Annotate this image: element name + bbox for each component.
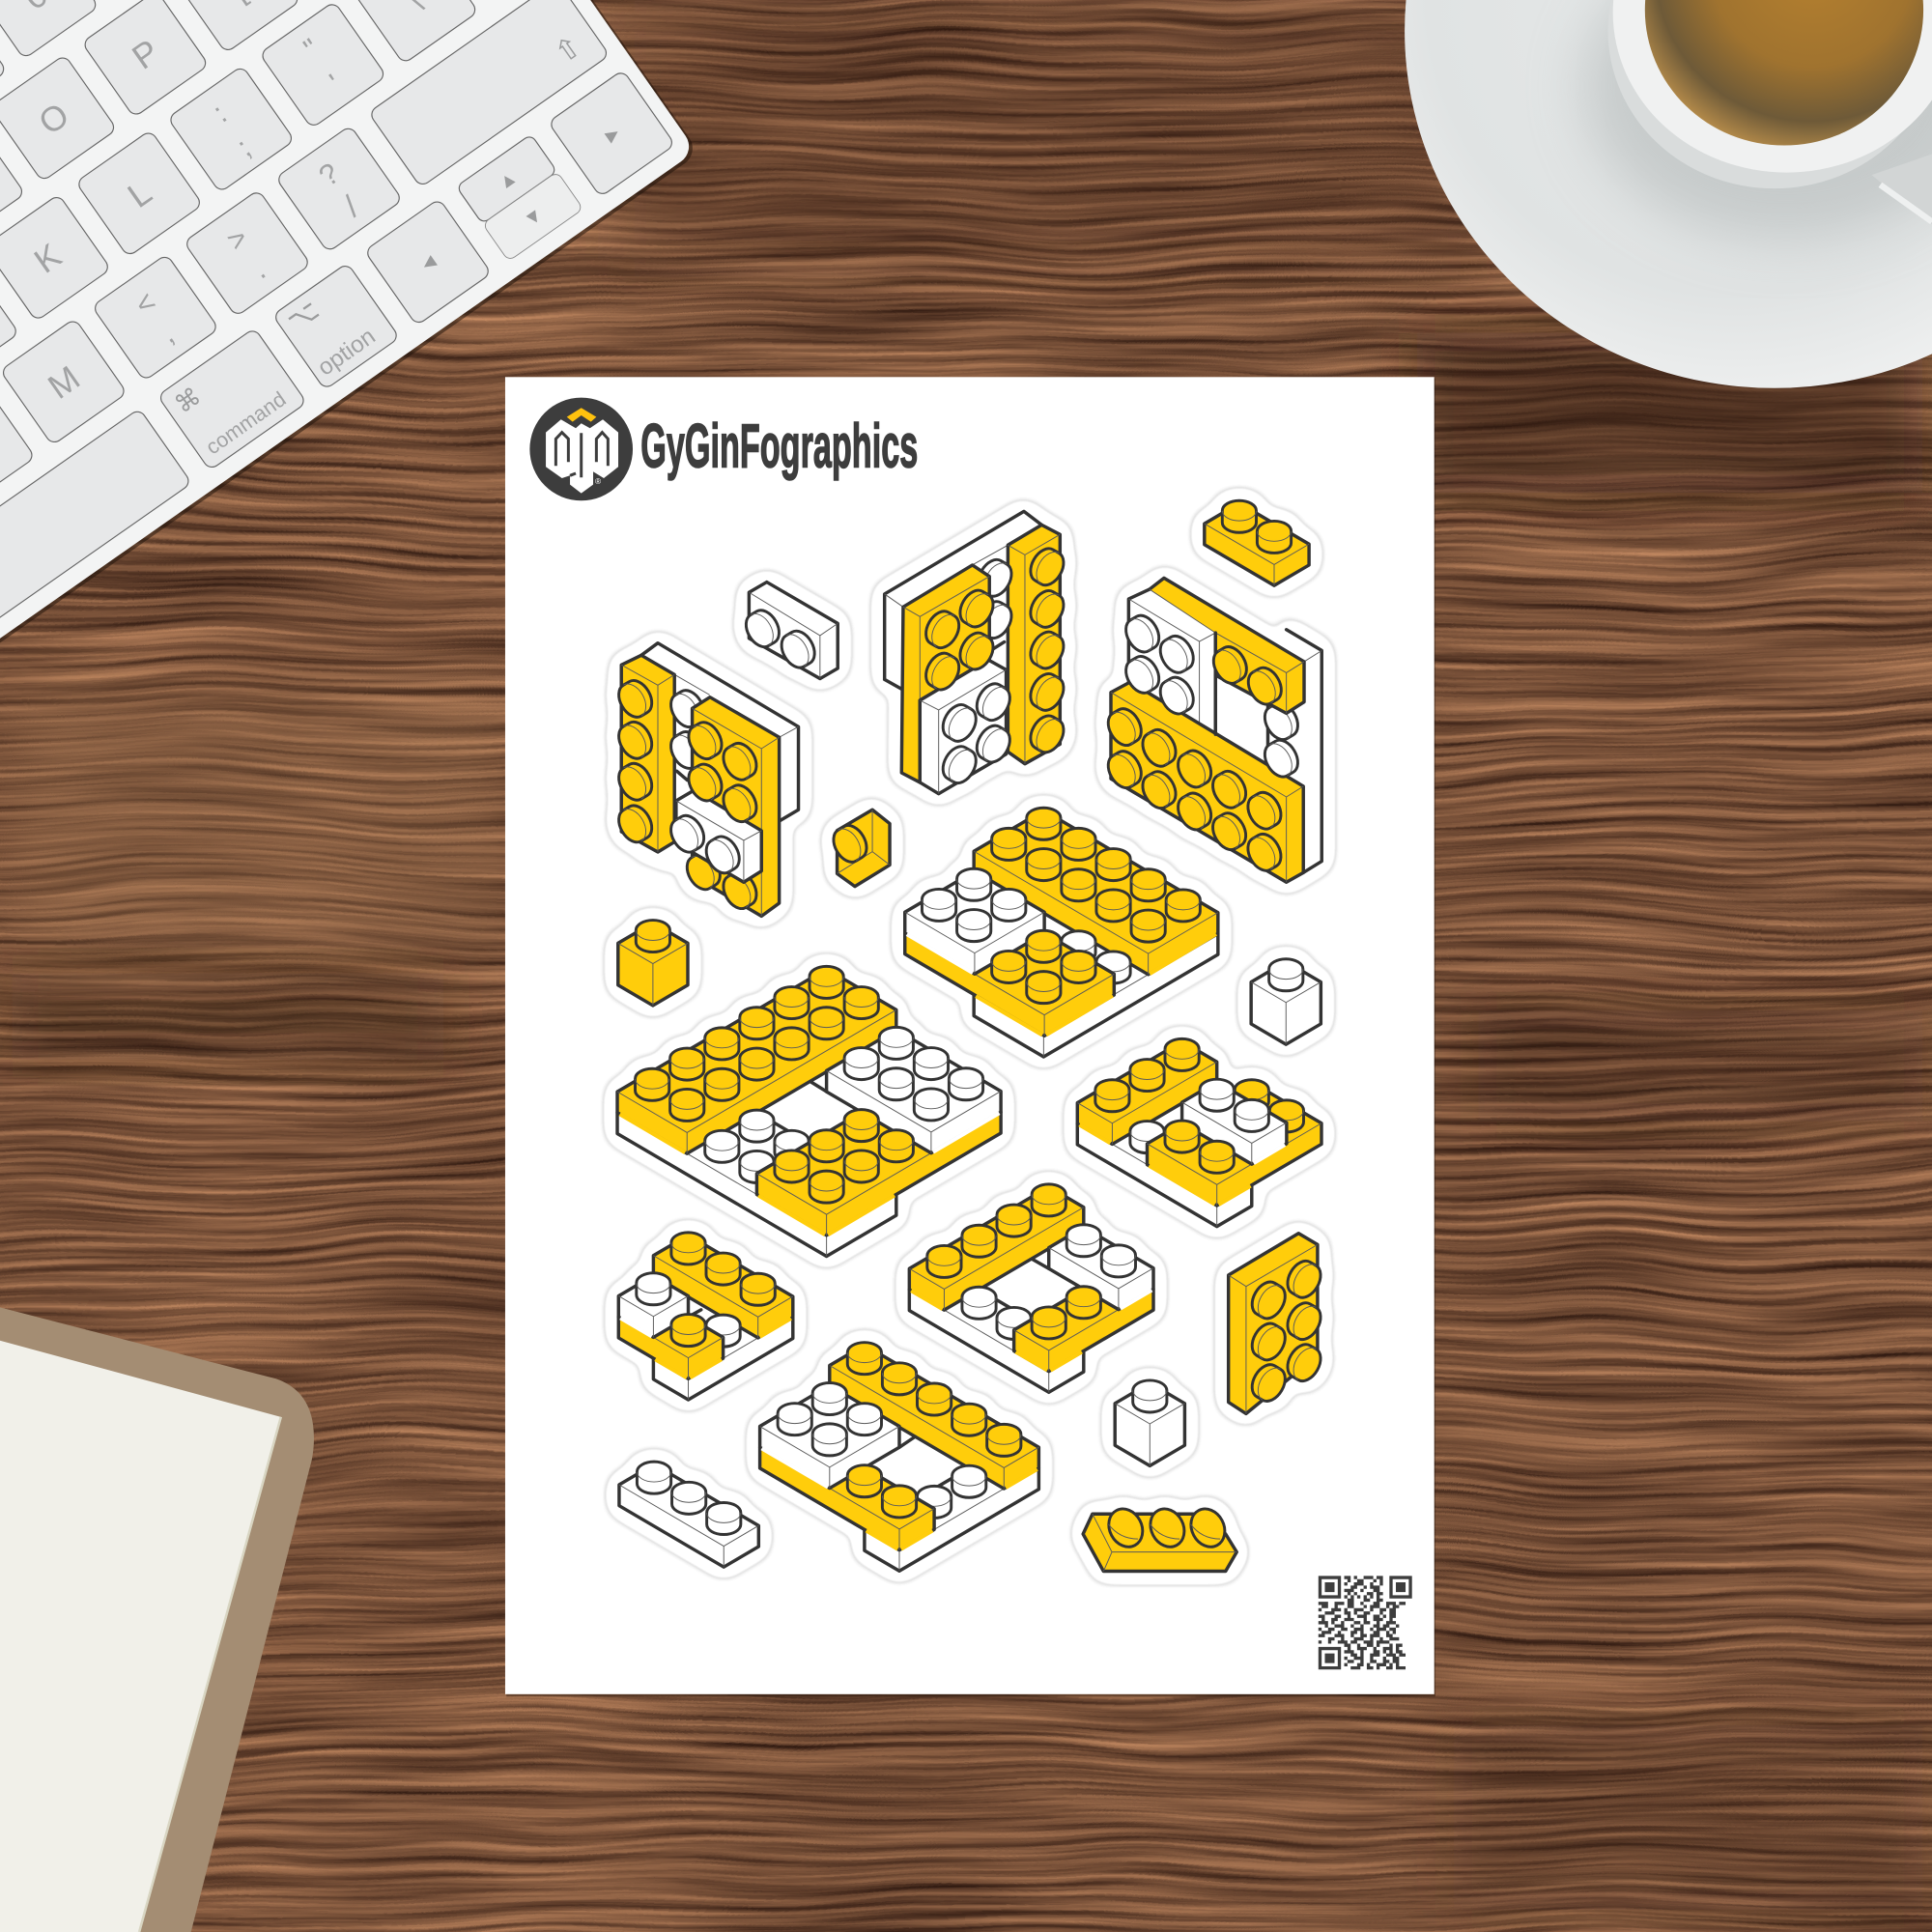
white base brick	[909, 1269, 1084, 1392]
yellow upper strip	[1150, 578, 1304, 713]
yellow back brick	[1077, 1038, 1217, 1144]
white right bar	[1282, 630, 1321, 872]
sticker: white cube brick right	[1251, 959, 1321, 1044]
sticker: wall letter left	[619, 643, 799, 916]
white top brick	[1049, 1227, 1153, 1310]
keyboard: K	[27, 236, 69, 281]
keyboard: command	[201, 386, 291, 459]
sticker: yellow plate right	[1229, 1234, 1321, 1413]
keyboard: '	[324, 68, 348, 99]
notebook	[0, 1307, 314, 1932]
sticker: small yellow 2-stud brick	[1205, 500, 1309, 585]
logo: GyGinFographics	[529, 398, 918, 500]
logo mark: ®	[595, 476, 601, 486]
sticker: small white 2-stud wall brick	[746, 582, 838, 679]
keyboard: ,	[154, 318, 180, 350]
yellow long brick	[830, 1343, 1038, 1489]
sticker: wall letter centre	[885, 511, 1064, 794]
yellow 2x6 brick	[617, 966, 896, 1153]
sticker: big flat letter	[617, 966, 1001, 1257]
yellow front brick	[1014, 1268, 1153, 1372]
hole edges	[1266, 705, 1269, 753]
yellow back brick	[909, 1184, 1084, 1310]
right yellow block	[693, 697, 780, 916]
keyboard: M	[42, 358, 87, 407]
yellow front brick	[905, 893, 1114, 1036]
keyboard	[0, 0, 693, 643]
QR code	[1319, 1576, 1412, 1669]
yellow upper block	[901, 565, 989, 782]
sticker: yellow 3-stud side brick	[1083, 1503, 1236, 1572]
white backing plate	[885, 511, 1060, 739]
sticker: white 3-stud brick	[619, 1462, 758, 1567]
white backing plate	[640, 643, 799, 863]
keyboard: O	[32, 96, 76, 142]
white front brick	[676, 790, 761, 882]
white upper block	[1128, 589, 1215, 739]
window opening	[863, 1423, 967, 1509]
keyboard: ⇧	[549, 29, 588, 71]
logo wordmark: GyGinFographics	[640, 411, 918, 480]
keyboard: ⌘	[170, 382, 207, 420]
white base brick	[653, 1297, 793, 1400]
white base brick	[617, 1071, 896, 1257]
keyboard: <	[129, 285, 162, 322]
keyboard: /	[338, 189, 366, 224]
window opening	[982, 1244, 1078, 1331]
yellow front brick	[1148, 1082, 1321, 1206]
left yellow column	[621, 655, 674, 852]
sticker: flat letter lower left	[618, 1233, 793, 1400]
keyboard: option	[313, 324, 381, 382]
window opening	[739, 1060, 881, 1164]
keyboard: L	[121, 173, 158, 215]
keyboard: ▼	[524, 207, 543, 227]
white top brick	[760, 1385, 899, 1489]
sticker: flat letter centre lower	[909, 1184, 1153, 1392]
white base brick	[865, 1448, 1038, 1571]
keyboard: ;	[231, 131, 257, 163]
white single brick	[618, 1275, 688, 1337]
sticker: flat letter top centre	[905, 808, 1218, 1057]
yellow lower brick	[756, 1071, 1001, 1236]
window opening	[1144, 1099, 1185, 1139]
white base brick	[974, 893, 1218, 1057]
logo mark	[529, 398, 633, 500]
sticker: white cube brick lower	[1115, 1380, 1184, 1465]
white base brick	[1077, 1103, 1252, 1227]
coffee cup and saucer	[1405, 0, 1932, 388]
white top brick	[1182, 1082, 1287, 1164]
sticker: yellow cube brick	[618, 921, 688, 1006]
big yellow plate	[1111, 682, 1303, 882]
yellow front brick	[760, 1427, 934, 1550]
keyboard: ⌥	[281, 294, 325, 338]
sticker sheet paper	[505, 377, 1435, 1696]
keyboard: ▶	[602, 123, 623, 145]
keyboard: ?	[313, 156, 346, 193]
keyboard: .	[246, 254, 271, 285]
keyboard: P	[126, 32, 166, 77]
tall yellow column	[1008, 525, 1060, 764]
yellow back brick	[653, 1233, 793, 1338]
sticker: wall letter right	[1108, 578, 1321, 882]
sticker: flat letter bottom centre	[760, 1343, 1038, 1571]
white upper brick	[827, 1027, 1001, 1153]
sticker: flat letter right	[1077, 1038, 1321, 1227]
window opening	[685, 1293, 727, 1333]
window opening	[1208, 671, 1282, 770]
keyboard: "	[298, 33, 326, 66]
keyboard: ◀	[418, 251, 439, 273]
white top brick	[905, 871, 1044, 974]
keyboard: >	[221, 221, 254, 258]
white lower block	[920, 660, 1007, 794]
sticker: single yellow side-stud block	[834, 810, 890, 887]
yellow long brick	[974, 808, 1218, 975]
window opening	[1040, 909, 1084, 949]
keyboard: :	[207, 98, 233, 128]
yellow front brick	[618, 1296, 724, 1378]
keyboard: ▲	[497, 169, 517, 190]
